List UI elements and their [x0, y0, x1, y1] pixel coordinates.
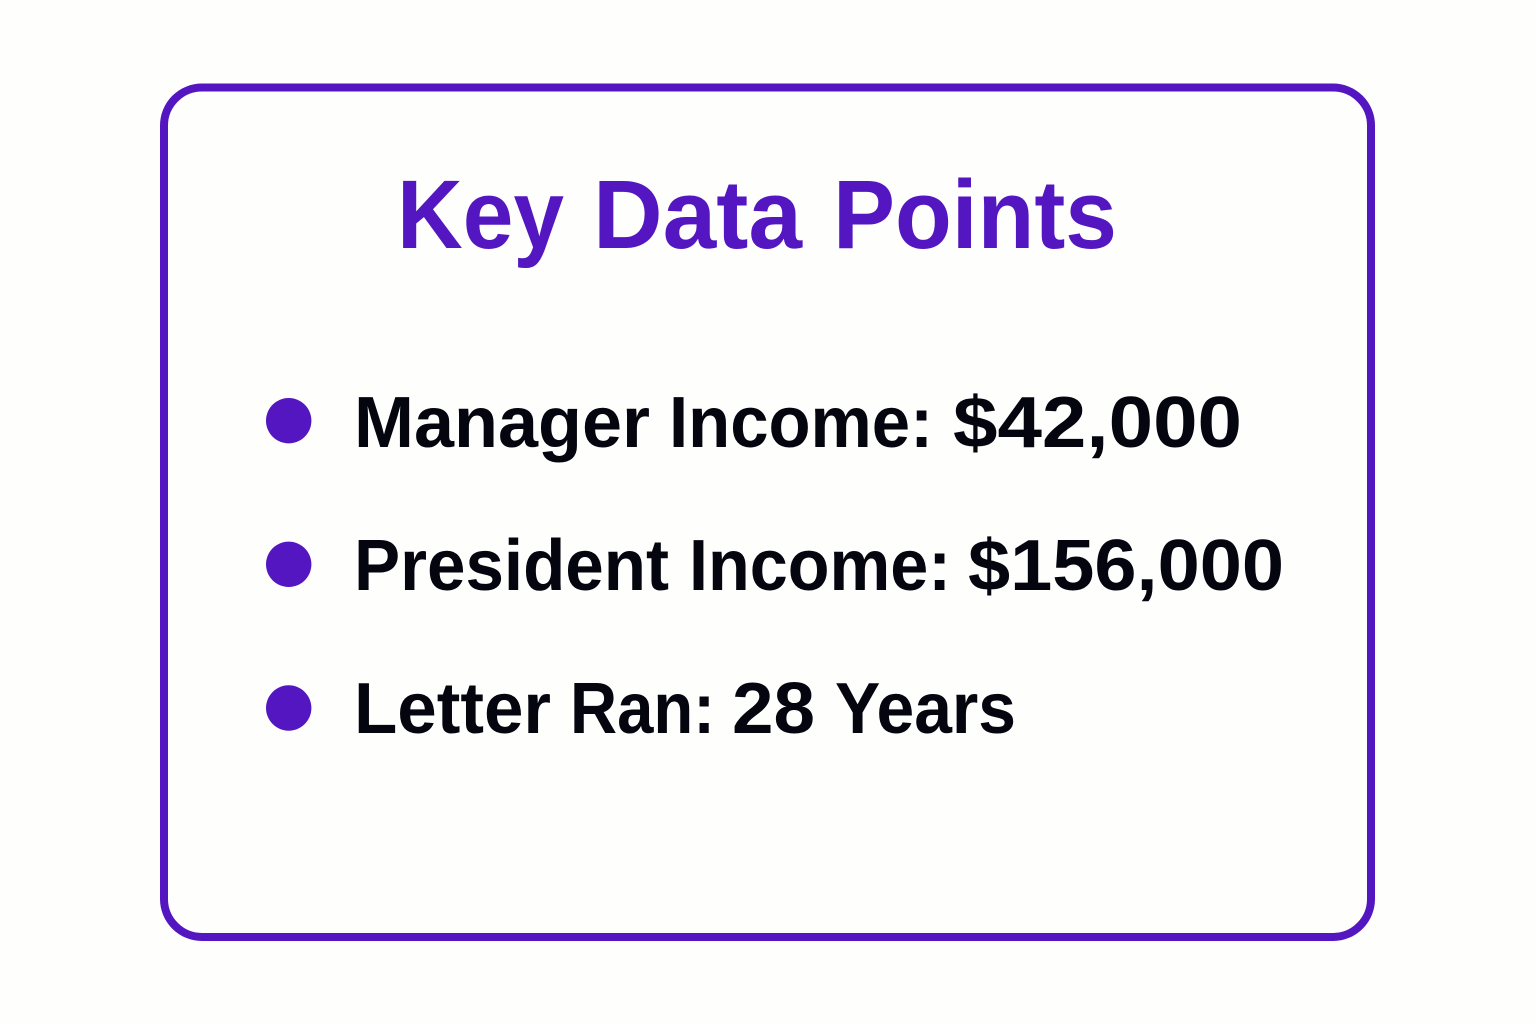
- text: letter ran: 28: [732, 669, 815, 749]
- text: manager income: $42,000: [953, 383, 1242, 463]
- list item: president income: [266, 526, 1284, 606]
- panel: key data points card: [164, 88, 1371, 937]
- title: Data: [593, 160, 803, 269]
- text: president income: President: [354, 526, 669, 606]
- text: manager income: Income:: [669, 383, 933, 463]
- icon: bullet: [266, 398, 311, 443]
- text: letter ran: Letter: [354, 669, 551, 749]
- text: president income: Income:: [689, 526, 951, 606]
- list item: letter ran: [266, 669, 1016, 749]
- text: letter ran: Ran:: [570, 669, 715, 749]
- icon: bullet: [266, 685, 311, 731]
- text: president income: $156,000: [968, 526, 1284, 606]
- title: Key: [397, 160, 564, 269]
- icon: bullet: [266, 542, 311, 587]
- text: letter ran: Years: [835, 669, 1016, 749]
- list item: manager income: [266, 383, 1242, 463]
- text: manager income: Manager: [354, 383, 650, 463]
- title: Points: [833, 160, 1117, 269]
